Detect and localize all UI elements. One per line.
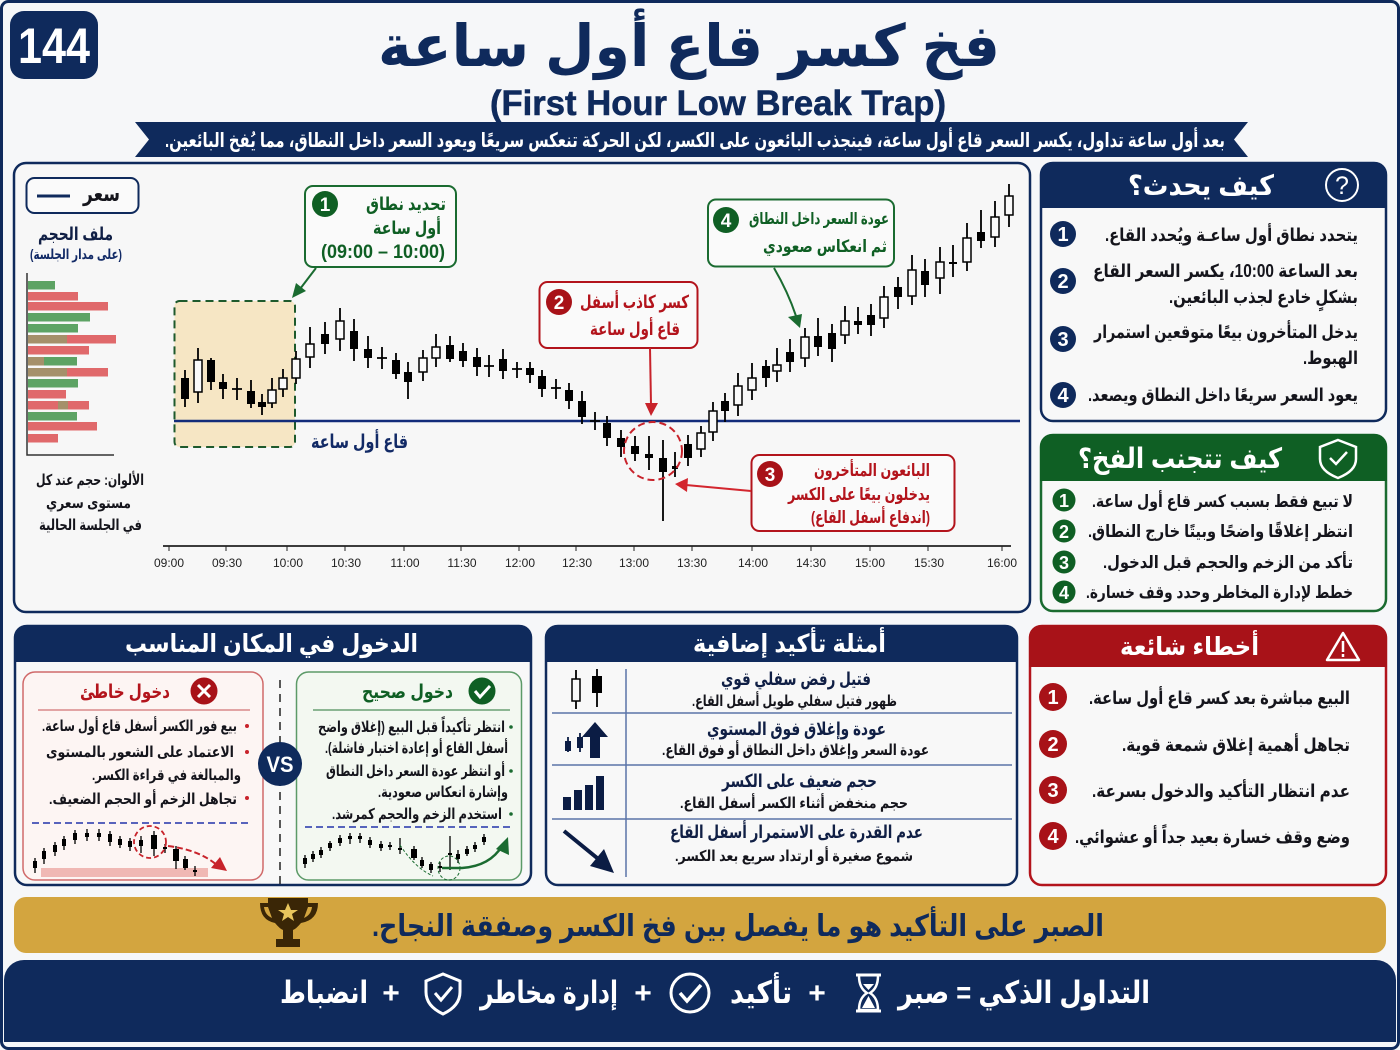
legend: price: سعر (82, 183, 120, 206)
panel: extra confirmation examples (545, 625, 1018, 885)
time axis: 11:30 (447, 556, 477, 570)
icon: warning triangle (1327, 633, 1359, 660)
tip 3: تأكد من الزخم والحجم قبل الدخول. (1103, 551, 1353, 573)
correct entry bullets: أسفل القاع أو إعادة اختبار فاشلة). (325, 738, 508, 757)
subtitle: (First Hour Low Break Trap) (490, 84, 946, 123)
step 1 (1050, 221, 1358, 247)
heading: volume profile (30, 224, 122, 262)
header: right entry (14, 625, 532, 662)
footer: smart trading formula: انضباط (280, 975, 368, 1010)
banner: patience: الصبر على التأكيد هو ما يفصل بين فخ الكسر وصفقة النجاح. (372, 906, 1104, 944)
text: colour note: مستوى سعري (46, 495, 131, 513)
header: avoid (1040, 434, 1387, 481)
mini chart: correct entry (303, 827, 510, 880)
icon: shield check (1320, 440, 1356, 478)
icon: trophy (260, 898, 318, 947)
step 3: الهبوط. (1303, 348, 1358, 369)
correct entry bullets: أو انتظر عودة السعر داخل النطاق (326, 761, 505, 780)
heading: correct entry (313, 678, 510, 710)
mistake 3: 3 (1047, 780, 1059, 802)
header: mistakes (1029, 625, 1387, 667)
callout 3: late sellers: البائعون المتأخرون (814, 459, 930, 481)
wrong entry bullets: بيع فور الكسر أسفل قاع أول ساعة. (42, 716, 237, 735)
heading: wrong entry: دخول خاطئ (80, 682, 170, 703)
time axis: 09:30 (212, 556, 242, 570)
arrow: callout 1 to range (292, 268, 316, 298)
time axis: 15:00 (855, 556, 885, 570)
mistake 3: عدم انتظار التأكيد والدخول بسرعة. (1092, 779, 1350, 802)
icon: candles and up arrow (565, 722, 608, 758)
label: first hour low: قاع أول ساعة (311, 429, 408, 453)
wrong entry bullets: الاعتماد على الشعور بالمستوى (46, 744, 234, 761)
chart: volume profile bars (27, 273, 116, 455)
panel: right place to enter (14, 625, 532, 885)
icon: question mark: ? (1335, 172, 1349, 200)
tip 4: 4 (1059, 583, 1069, 603)
icon: down arrow (564, 831, 614, 873)
header: how (1040, 162, 1387, 208)
icon: question mark (1326, 169, 1358, 201)
callout 2: false break: 2 (554, 293, 564, 314)
mistake 2: 2 (1047, 734, 1059, 756)
heading: volume profile: ملف الحجم (38, 224, 113, 244)
mistake 1: 1 (1047, 687, 1059, 709)
callout 3: late sellers: (اندفاع أسفل القاع) (811, 506, 930, 527)
mistake 2: تجاهل أهمية إغلاق شمعة قوية. (1122, 733, 1350, 756)
correct entry bullets: استخدم الزخم والحجم كمرشد. (332, 806, 502, 823)
row 1: lower wick rejection: ظهور فتيل سفلي طويل أسفل القاع. (692, 691, 897, 710)
heading: correct entry: دخول صحيح (362, 682, 453, 703)
time axis: 09:00 (154, 556, 184, 570)
banner: patience (14, 897, 1386, 953)
step 1: 1 (1057, 224, 1069, 246)
arrow: callout 2 to break (645, 348, 658, 416)
row 4: failure to continue (564, 820, 923, 873)
time axis: 10:00 (273, 556, 303, 570)
legend: price (26, 178, 138, 213)
row 1: lower wick rejection: فتيل رفض سفلي قوي (721, 669, 871, 690)
mistake 4: 4 (1047, 826, 1059, 848)
tip 2: انتظر إغلاقًا واضحًا وبيتًا خارج النطاق. (1088, 520, 1353, 542)
tip 3: 3 (1059, 553, 1069, 573)
callout 2: false break: كسر كاذب أسفل (580, 290, 689, 313)
step 2: بعد الساعة 10:00، يكسر السعر القاع (1093, 261, 1358, 282)
step 3: 3 (1057, 329, 1069, 351)
header: mistakes: أخطاء شائعة (1120, 630, 1259, 661)
arrow: callout 3 to sellers (675, 478, 751, 492)
text: colour note: الألوان: حجم عند كل (36, 471, 144, 489)
time axis: 14:30 (796, 556, 826, 570)
time axis (154, 546, 1017, 570)
first hour range box (174, 301, 295, 447)
icon: shield (426, 974, 460, 1014)
heading: volume profile: (على مدار الجلسة) (30, 246, 122, 262)
panel: how it happens (1040, 162, 1387, 421)
wrong entry bullets: تجاهل الزخم أو الحجم الضعيف. (49, 789, 237, 808)
ribbon summary (135, 122, 1248, 157)
mistake 1 (1039, 683, 1350, 711)
panel: chart (14, 163, 1030, 612)
tip 1: لا تبيع فقط بسبب كسر قاع أول ساعة. (1092, 490, 1353, 512)
tip 2 (1052, 520, 1353, 542)
row 3: weak volume: حجم منخفض أثناء الكسر أسفل القاع. (680, 793, 908, 812)
text: colour note (36, 471, 144, 534)
tip 3 (1052, 550, 1353, 574)
mini chart: wrong entry (32, 823, 251, 877)
mistake 4 (1039, 822, 1350, 850)
header: confirmation: أمثلة تأكيد إضافية (693, 627, 886, 658)
time axis: 11:00 (390, 556, 420, 570)
badge: 144: 144 (18, 18, 90, 74)
icon: volume bars (563, 776, 604, 810)
row 4: failure to continue: شموع صغيرة أو ارتداد سريع بعد الكسر. (675, 846, 913, 865)
row 3: weak volume: حجم ضعيف على الكسر (721, 771, 877, 792)
callout 1: define range: (09:00 – 10:00) (321, 242, 445, 263)
card: wrong entry (23, 672, 263, 880)
step 4 (1050, 382, 1358, 408)
callout 4: return into range: عودة السعر داخل النطاق (749, 211, 889, 228)
divider with VS (258, 680, 302, 885)
time axis: 12:30 (562, 556, 592, 570)
candlestick chart (181, 184, 1013, 521)
mistake 2 (1039, 730, 1350, 758)
step 2 (1050, 261, 1358, 312)
callout 3: late sellers: يدخلون بيعًا على الكسر (787, 485, 930, 505)
footer: smart trading formula: إدارة مخاطر (478, 975, 618, 1011)
wrong entry bullets (42, 716, 249, 808)
tip 1 (1052, 488, 1353, 512)
mistake 3 (1039, 776, 1350, 804)
footer: smart trading formula: التداول الذكي = صبر (896, 975, 1150, 1011)
callout 1: define range (305, 186, 456, 267)
callout 2: false break: قاع أول ساعة (590, 317, 680, 340)
text: colour note: في الجلسة الحالية (39, 517, 142, 534)
time axis: 10:30 (331, 556, 361, 570)
icon: hourglass (856, 975, 881, 1011)
step 4: 4 (1057, 385, 1069, 407)
correct entry bullets (318, 716, 513, 823)
heading: wrong entry (38, 678, 250, 710)
time axis: 12:00 (505, 556, 535, 570)
callout 2: false break (540, 282, 698, 348)
row 1: lower wick rejection (572, 669, 897, 710)
time axis: 13:30 (677, 556, 707, 570)
first hour low line (174, 420, 1020, 422)
mistake 4: وضع وقف خسارة بعيد جداً أو عشوائي. (1075, 824, 1350, 848)
time axis: 15:30 (914, 556, 944, 570)
step 3 (1050, 320, 1358, 369)
icon: check circle (671, 974, 709, 1012)
callout 3: late sellers: 3 (765, 465, 775, 486)
time axis: 14:00 (738, 556, 768, 570)
panel: common mistakes (1029, 625, 1387, 885)
header: confirmation (545, 625, 1018, 662)
footer: smart trading formula (4, 960, 1396, 1042)
row 3: weak volume (563, 771, 908, 812)
callout 4: return into range: ثم انعكاس صعودي (763, 237, 887, 257)
mistake 1: البيع مباشرة بعد كسر قاع أول ساعة. (1089, 686, 1350, 709)
icon: candles (572, 669, 602, 709)
footer: smart trading formula: + (634, 977, 652, 1010)
header: right entry: الدخول في المكان المناسب (125, 630, 418, 659)
footer: smart trading formula: تأكيد (730, 972, 792, 1010)
title: فخ كسر قاع أول ساعة (378, 8, 1000, 81)
step 2: بشكلٍ خادع لجذب البائعين. (1169, 287, 1358, 312)
row 4: failure to continue: عدم القدرة على الاستمرار أسفل القاع (670, 820, 923, 843)
callout 1: define range: 1 (320, 195, 331, 216)
callout 1: define range: تحديد نطاق (366, 194, 446, 214)
header: avoid: كيف تتجنب الفخ؟ (1078, 443, 1283, 475)
footer: smart trading formula: + (382, 977, 400, 1010)
row 2: return and close above: عودة السعر وإغلاق داخل النطاق أو فوق القاع. (662, 740, 929, 759)
header: how: كيف يحدث؟ (1128, 170, 1275, 201)
tip 2: 2 (1059, 522, 1069, 542)
time axis: 16:00 (987, 556, 1017, 570)
callout 4: return into range (708, 200, 894, 266)
callout 1: define range: أول ساعة (373, 216, 441, 239)
footer: smart trading formula: + (808, 977, 826, 1010)
wrong entry bullets: والمبالغة في قراءة الكسر. (92, 767, 241, 784)
tip 4 (1052, 580, 1353, 604)
correct entry bullets: وإشارة انعكاس صعودية. (378, 784, 508, 801)
callout 4: return into range: 4 (721, 211, 732, 232)
tip 1: 1 (1059, 491, 1069, 511)
callout 3: late sellers (752, 455, 954, 531)
row 2: return and close above (565, 719, 929, 759)
card: correct entry (296, 672, 522, 880)
divider with VS: VS (266, 752, 294, 777)
false break circle (624, 422, 682, 480)
panel: how to avoid the trap (1040, 434, 1387, 611)
step 2: 2 (1057, 271, 1069, 293)
arrow: callout 4 to rally (774, 268, 802, 328)
time axis: 13:00 (619, 556, 649, 570)
row 2: return and close above: عودة وإغلاق فوق المستوي (707, 719, 886, 740)
correct entry bullets: انتظر تأكيداً قبل البيع (إغلاق واضح (318, 716, 505, 736)
